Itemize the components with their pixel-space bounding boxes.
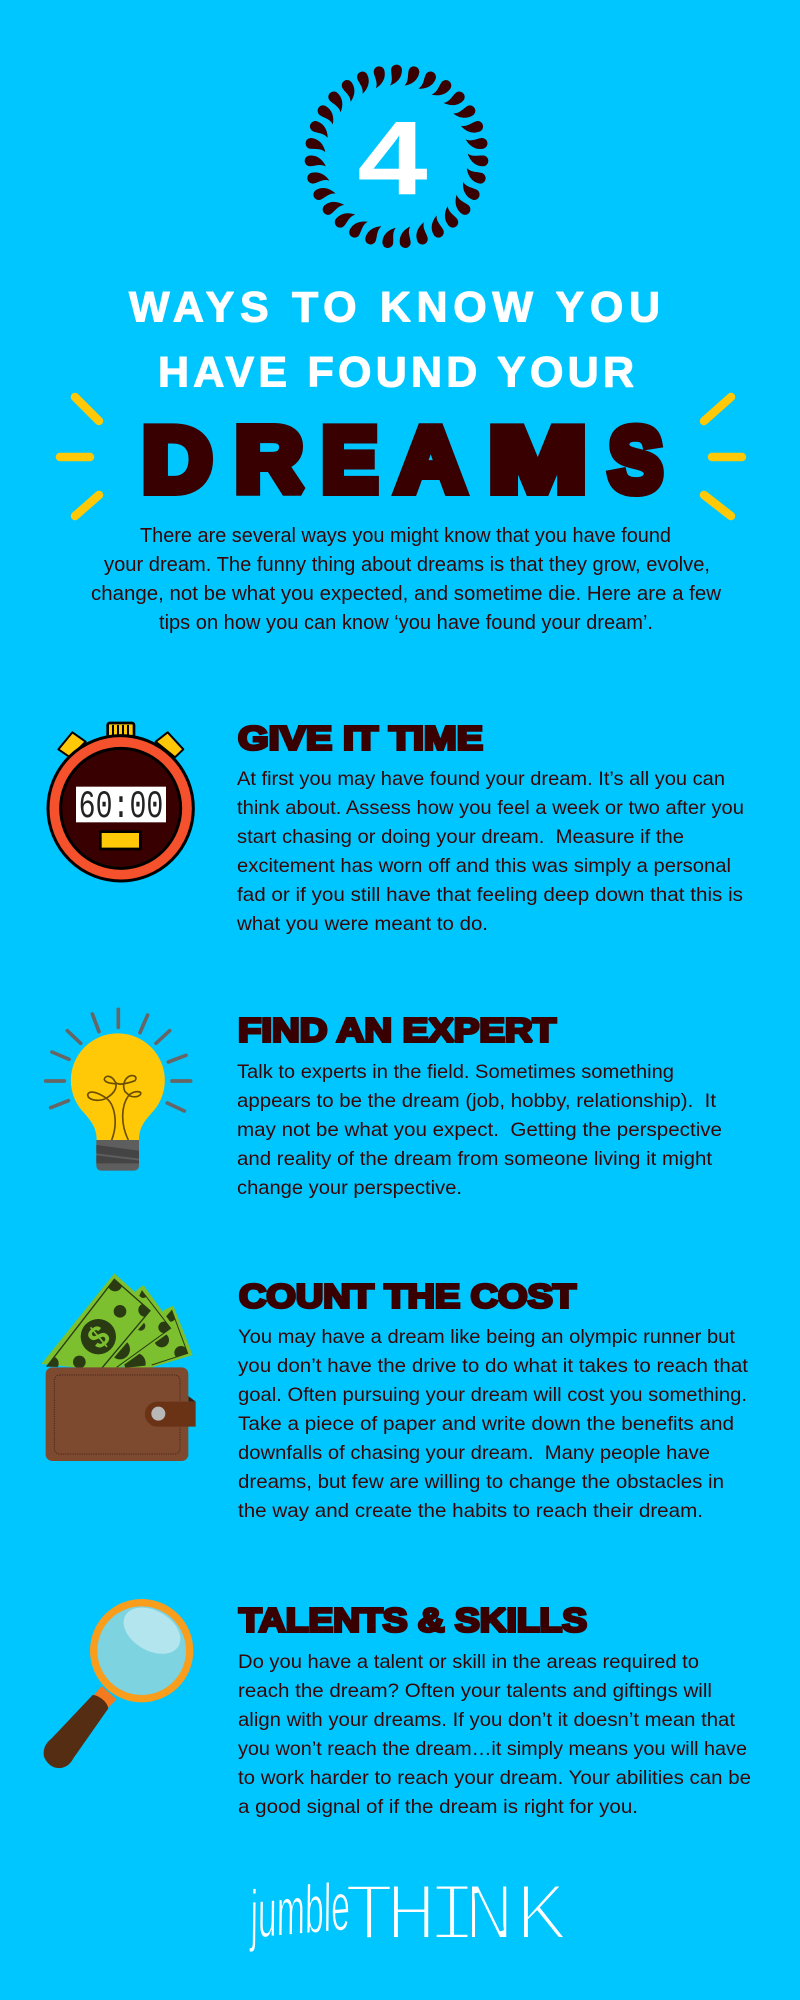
title word: dreams: S <box>609 410 663 511</box>
heading: TALENTS & SKILLS <box>239 1602 587 1640</box>
body text <box>238 1326 749 1522</box>
body text: align with your dreams. If you don’t it doesn’t mean that <box>238 1709 736 1731</box>
body text: dreams, but few are willing to change the obstacles in <box>238 1471 724 1493</box>
sunburst left <box>60 397 99 516</box>
body text: change your perspective. <box>237 1177 462 1199</box>
panel: count the cost <box>41 1273 749 1522</box>
body text: You may have a dream like being an olympic runner but <box>238 1326 736 1348</box>
logo: jumbleTHINK <box>243 1869 567 1964</box>
body text: Talk to experts in the field. Sometimes something <box>237 1061 674 1083</box>
icon: stopwatch: 60:00 <box>79 785 163 829</box>
body text: a good signal of if the dream is right for you. <box>238 1796 638 1818</box>
icon: wallet with money <box>41 1273 196 1461</box>
body text <box>237 1061 722 1199</box>
title line 2: HAVE FOUND YOUR <box>158 348 634 396</box>
title word: dreams: R <box>235 408 303 511</box>
intro paragraph: tips on how you can know ‘you have found your dream’. <box>159 612 653 634</box>
title word: dreams: D <box>142 408 212 510</box>
body text: excitement has worn off and this was simply a personal <box>237 855 731 877</box>
body text: you won’t reach the dream…it simply means you will have <box>238 1738 747 1760</box>
body text: appears to be the dream (job, hobby, relationship). It <box>237 1090 717 1112</box>
icon: wallet with money: $ <box>81 1318 117 1356</box>
panel: give it time <box>48 720 744 935</box>
icon: stopwatch <box>48 723 193 881</box>
intro paragraph <box>91 525 722 634</box>
body text: goal. Often pursuing your dream will cost you something. <box>238 1384 747 1406</box>
ring of drops <box>304 65 489 249</box>
body text: start chasing or doing your dream. Measure if the <box>237 826 684 848</box>
icon: magnifying glass <box>44 1598 193 1768</box>
title line 1: WAYS TO KNOW YOU <box>129 284 660 332</box>
title word: dreams: A <box>396 409 465 511</box>
body text: what you were meant to do. <box>236 913 488 935</box>
body text: the way and create the habits to reach their dream. <box>238 1500 703 1522</box>
panel: talents and skills <box>44 1598 751 1818</box>
title word: dreams: E <box>322 409 378 511</box>
body text: reach the dream? Often your talents and giftings will <box>238 1680 712 1702</box>
body text: and reality of the dream from someone living it might <box>237 1148 713 1170</box>
heading: COUNT THE COST <box>239 1278 577 1316</box>
heading: GIVE IT TIME <box>238 720 483 758</box>
body text <box>236 768 744 935</box>
body text: downfalls of chasing your dream. Many people have <box>238 1442 710 1464</box>
body text: fad or if you still have that feeling deep down that this is <box>237 884 743 906</box>
body text: to work harder to reach your dream. Your abilities can be <box>238 1767 751 1789</box>
heading: FIND AN EXPERT <box>238 1012 557 1050</box>
panel: find an expert <box>46 1009 722 1199</box>
badge: number four in ring <box>304 65 489 249</box>
logo word: jumble: jumble <box>243 1869 353 1953</box>
numeral 4: 4 <box>358 99 428 217</box>
intro paragraph: your dream. The funny thing about dreams is that they grow, evolve, <box>104 554 710 576</box>
sunburst right <box>704 397 742 516</box>
body text: At first you may have found your dream. It’s all you can <box>237 768 725 790</box>
title <box>129 284 663 511</box>
body text: think about. Assess how you feel a week or two after you <box>237 797 744 819</box>
intro paragraph: There are several ways you might know that you have found <box>140 525 671 547</box>
body text <box>238 1651 751 1818</box>
body text: you don’t have the drive to do what it takes to reach that <box>238 1355 749 1377</box>
body text: Do you have a talent or skill in the areas required to <box>238 1651 699 1673</box>
body text: may not be what you expect. Getting the perspective <box>237 1119 722 1141</box>
title word: dreams: M <box>489 409 586 511</box>
icon: light bulb <box>46 1009 191 1171</box>
intro paragraph: change, not be what you expected, and sometime die. Here are a few <box>91 583 722 605</box>
logo word: THINK: THINK <box>343 1870 567 1964</box>
title word: dreams <box>142 408 663 511</box>
body text: Take a piece of paper and write down the benefits and <box>238 1413 734 1435</box>
